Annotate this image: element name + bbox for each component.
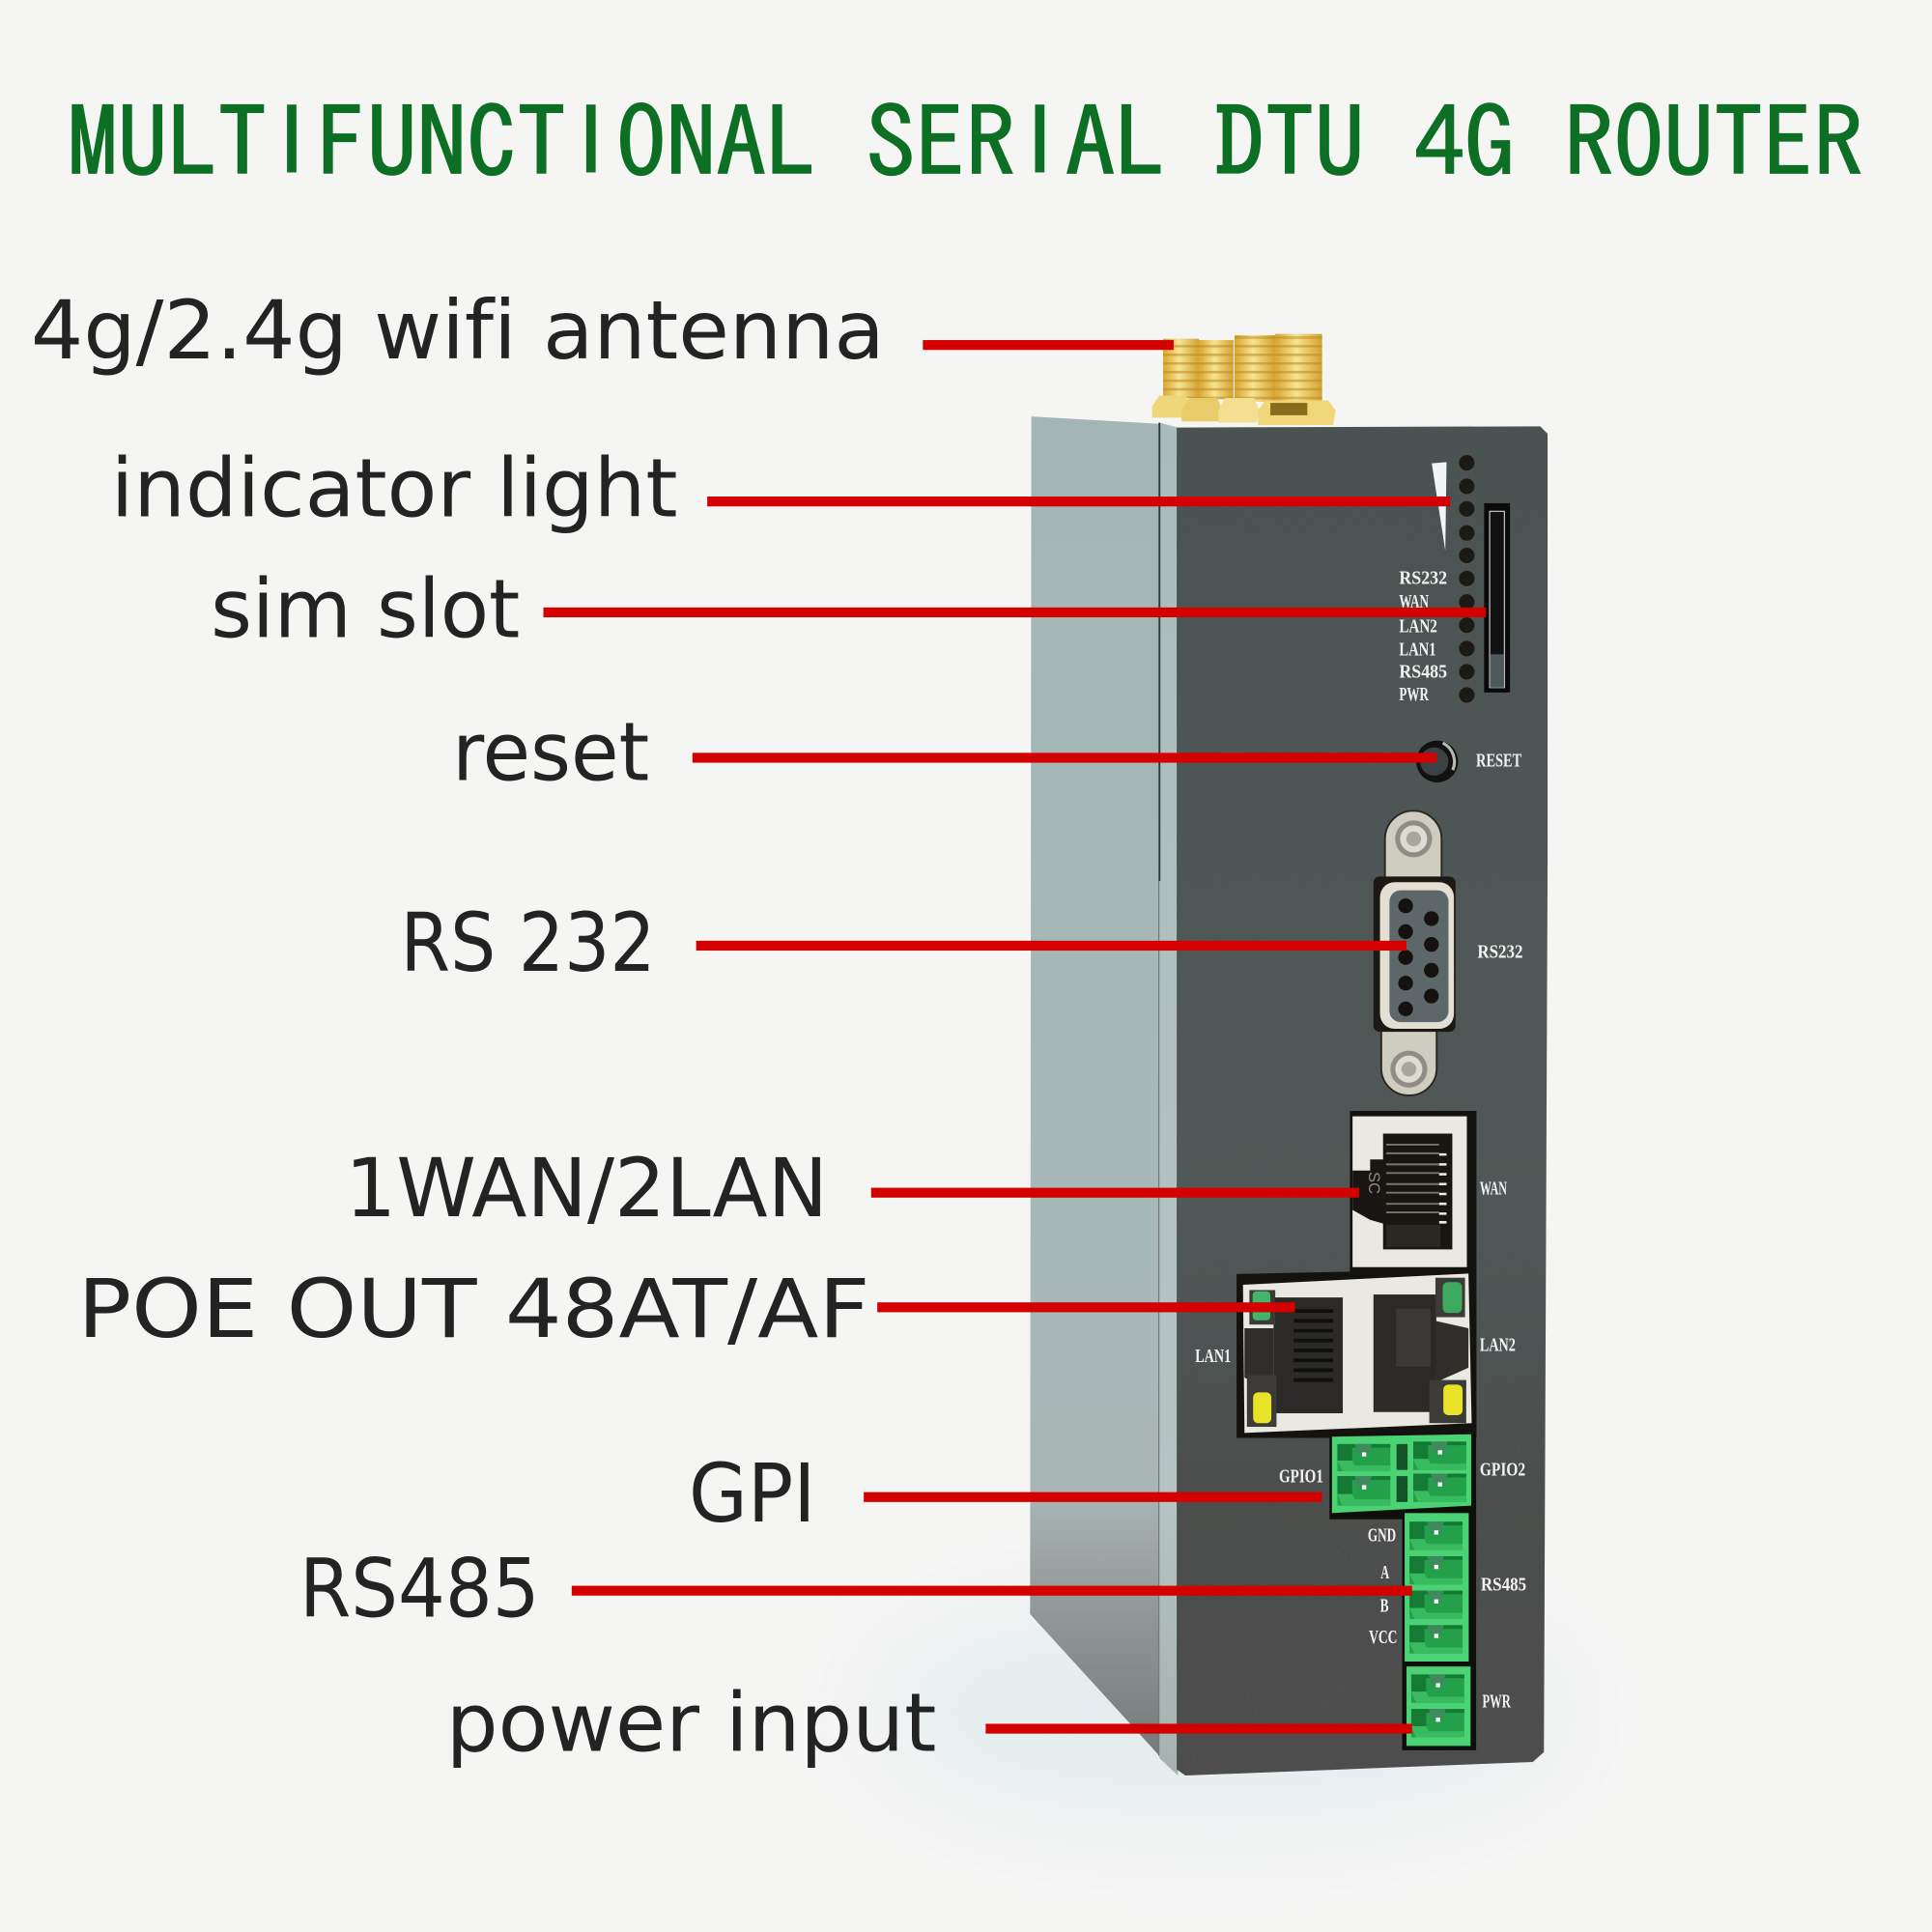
label: RS 232: RS 232	[401, 895, 656, 990]
LAN1 text: LAN1	[1195, 1346, 1231, 1367]
LAN jacks	[1243, 1273, 1471, 1433]
callout lines	[543, 340, 1486, 1734]
GPIO terminal block	[1332, 1435, 1471, 1513]
RS485 pin labels: A	[1380, 1562, 1390, 1583]
RS232 text: RS232	[1477, 942, 1523, 963]
GPIO1 text: GPIO1	[1279, 1465, 1323, 1487]
WAN text: WAN	[1480, 1179, 1507, 1200]
LED labels: RS485	[1399, 662, 1447, 683]
LED yellow LAN1	[1253, 1392, 1271, 1423]
LED green LAN1	[1253, 1292, 1270, 1321]
label: GPI: GPI	[689, 1446, 815, 1541]
LED green LAN2	[1442, 1282, 1463, 1313]
LAN2 text: LAN2	[1480, 1334, 1516, 1355]
front edge strip	[1159, 423, 1178, 1776]
label: 1WAN/2LAN: 1WAN/2LAN	[345, 1141, 828, 1236]
PWR text: PWR	[1482, 1690, 1511, 1712]
GPIO2 text: GPIO2	[1480, 1459, 1525, 1480]
LED labels: LAN2	[1399, 615, 1437, 637]
RS232 connector	[1374, 810, 1456, 1095]
label: indicator light: indicator light	[111, 440, 678, 535]
device: router	[1030, 334, 1548, 1776]
reset button	[1416, 741, 1458, 782]
terminal blocks backing	[1329, 1435, 1476, 1750]
WAN jack	[1236, 1111, 1476, 1438]
LED labels: LAN1	[1399, 639, 1436, 661]
RS485 pin labels: B	[1380, 1595, 1389, 1616]
floor shadow	[887, 1614, 1552, 1811]
RS485 text: RS485	[1481, 1575, 1526, 1596]
RS485 pin labels: VCC	[1369, 1627, 1397, 1648]
indicator wedge	[1432, 462, 1446, 551]
reset text: RESET	[1476, 750, 1521, 771]
LED column	[1459, 455, 1474, 702]
LED labels: RS232	[1399, 568, 1447, 589]
label: reset: reset	[452, 704, 649, 799]
lower seam	[1158, 881, 1160, 1756]
label: power input: power input	[446, 1676, 936, 1771]
RS485 pin labels	[1368, 1525, 1397, 1648]
side panel	[1030, 416, 1159, 1756]
RS485 terminal block	[1405, 1513, 1468, 1662]
label: RS485: RS485	[299, 1541, 540, 1635]
seam	[1158, 423, 1160, 881]
SIM slot	[1484, 503, 1510, 693]
front panel	[1177, 426, 1548, 1776]
LED labels: PWR	[1399, 684, 1429, 705]
title: MULTIFUNCTIONAL SERIAL DTU 4G ROUTER	[68, 84, 1863, 193]
LED labels	[1399, 568, 1447, 705]
LED labels: WAN	[1399, 591, 1429, 612]
label: sim slot: sim slot	[211, 561, 520, 656]
antenna connectors	[1152, 334, 1336, 425]
label: antenna: 4g/2.4g wifi antenna	[31, 283, 885, 378]
LED yellow LAN2	[1443, 1384, 1463, 1415]
label: POE OUT: POE OUT 48AT/AF	[77, 1262, 870, 1356]
power terminal block	[1406, 1666, 1470, 1746]
RS485 pin labels: GND	[1368, 1525, 1396, 1547]
WAN jack: SC	[1365, 1172, 1383, 1194]
